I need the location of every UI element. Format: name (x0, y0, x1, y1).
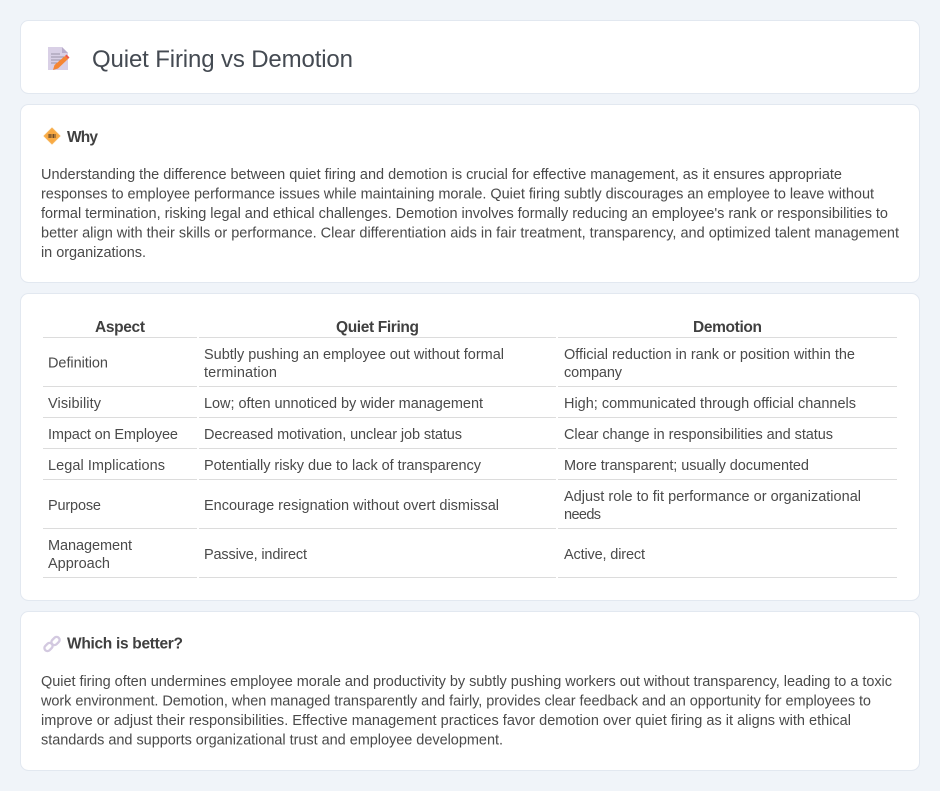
text block: why paragraph (41, 167, 899, 261)
row: visibility: Low; often unnoticed by wider management (204, 396, 483, 412)
text block: which is better paragraph: standards and supports organizational trust and employee development. (41, 732, 503, 748)
text block: why paragraph: formal termination, risking legal and ethical challenges. Demotion involves formally reducing an employee's rank or responsibilities to (41, 206, 888, 222)
title: Quiet Firing vs Demotion (92, 46, 353, 73)
table header row: Demotion (693, 319, 762, 336)
table header row: Quiet Firing (336, 319, 419, 336)
row: purpose: Adjust role to fit performance or organizational (564, 489, 861, 505)
row: legal implications (48, 458, 809, 474)
row: purpose: Purpose (48, 498, 101, 514)
text block: why paragraph: in organizations. (41, 245, 146, 261)
row: visibility: Visibility (48, 396, 102, 412)
row: visibility: High; communicated through official channels (564, 396, 856, 412)
icon: orange diamond (44, 128, 60, 144)
row: definition: Official reduction in rank or position within the (564, 347, 855, 363)
row: definition: company (564, 365, 623, 381)
text block: why paragraph: responses to employee performance issues while maintaining morale. Quiet firing subtly discourages an employee to leave without (41, 186, 874, 202)
row: visibility (48, 396, 856, 412)
row: management approach: Passive, indirect (204, 547, 307, 563)
text block: which is better paragraph: Quiet firing often undermines employee morale and productivity by subtly pushing workers out without transparency, leading to a toxic (41, 674, 892, 690)
icon: document with pencil (48, 47, 70, 70)
heading: why: Why (67, 129, 98, 146)
text block: which is better paragraph (40, 674, 892, 748)
icon: link (43, 636, 61, 652)
row: management approach: Approach (48, 556, 110, 572)
row: management approach (48, 538, 645, 572)
panel: which is better (20, 612, 920, 770)
row: impact on employee (48, 427, 833, 443)
row: purpose (48, 489, 861, 523)
row: management approach: Management (48, 538, 132, 554)
heading: which is better: Which is better? (67, 636, 183, 652)
row: purpose: needs (564, 507, 601, 523)
text block: which is better paragraph: work environment. Demotion, when managed transparently and fairly, provides clear feedback and an opportunity for employees to (40, 694, 871, 710)
row: management approach: Active, direct (564, 547, 645, 563)
panel: why (20, 104, 920, 282)
panel: comparison table (20, 294, 920, 600)
row: impact on employee: Decreased motivation, unclear job status (204, 427, 462, 443)
row: legal implications: Legal Implications (48, 458, 165, 474)
table header row: Aspect (95, 319, 145, 336)
row: definition: termination (204, 365, 277, 381)
row: definition: Definition (48, 356, 108, 372)
row: purpose: Encourage resignation without overt dismissal (204, 498, 499, 514)
row: legal implications: More transparent; usually documented (564, 458, 809, 474)
row: impact on employee: Impact on Employee (48, 427, 178, 443)
row: impact on employee: Clear change in responsibilities and status (564, 427, 833, 443)
row: definition: Subtly pushing an employee out without formal (204, 347, 504, 363)
text block: which is better paragraph: improve or adjust their responsibilities. Effective management practices favor demotion over quiet firing as it aligns with ethical (41, 713, 851, 729)
table header row (95, 319, 762, 336)
panel: header (20, 20, 920, 94)
text block: why paragraph: Understanding the difference between quiet firing and demotion is crucial for effective management, as it ensures appropriate (41, 167, 842, 183)
row: definition (48, 347, 855, 381)
text block: why paragraph: better align with their skills or performance. Clear differentiation aids in fair treatment, transparency, and optimized talent management (41, 226, 899, 242)
row: legal implications: Potentially risky due to lack of transparency (204, 458, 482, 474)
